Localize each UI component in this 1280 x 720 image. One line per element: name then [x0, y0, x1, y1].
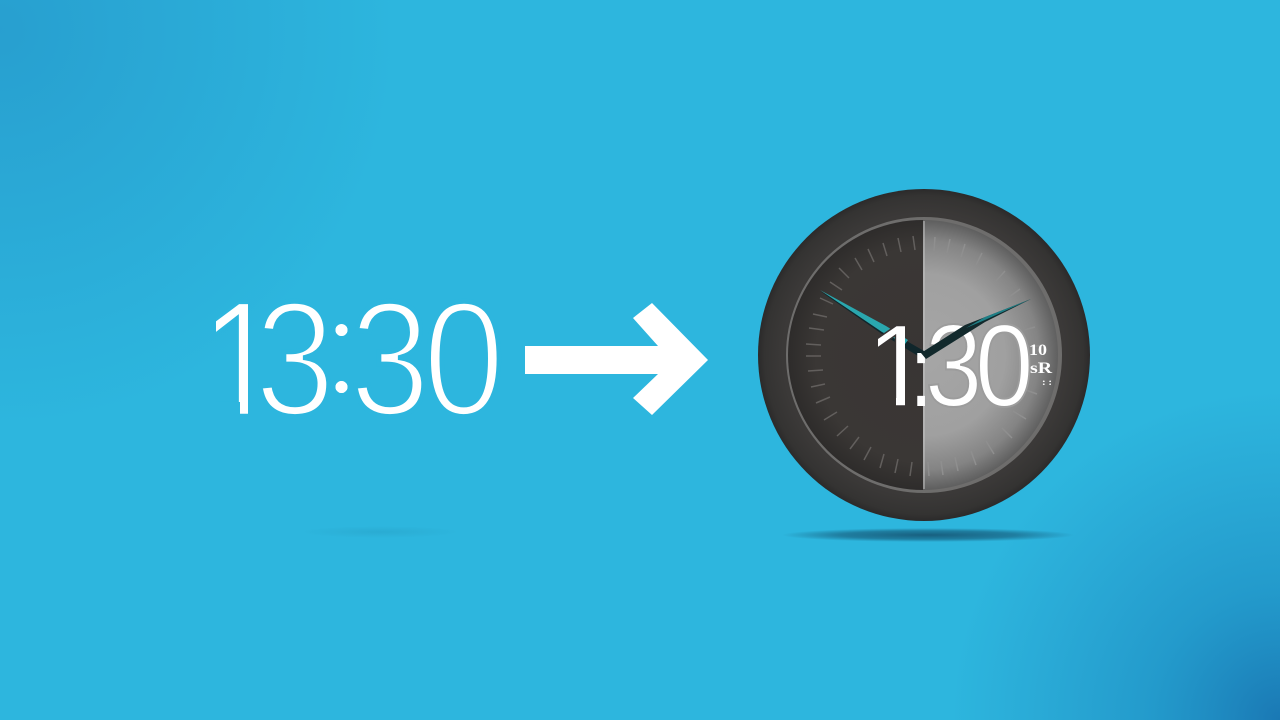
24-hour time: 13:30 — [216, 304, 497, 414]
tick marks — [806, 236, 1040, 476]
24-hour time: 13:30: 1 — [200, 268, 283, 450]
24-hour time: 13:30: 3 — [350, 267, 430, 450]
hour hand dark — [921, 299, 1031, 359]
tiny label: : : — [1042, 377, 1052, 387]
clock outer bezel — [758, 189, 1090, 521]
clock — [758, 189, 1090, 521]
digits 30 of 1:30: 0 — [975, 300, 1034, 431]
tiny label: 10 — [1029, 342, 1047, 359]
tiny label — [1029, 342, 1053, 387]
minute hand teal — [820, 290, 924, 359]
arrow — [525, 303, 708, 415]
digits 30 of 1:30: 3 — [925, 301, 982, 431]
24-hour time: 13:30: 3 — [255, 267, 335, 450]
digit 1 of 1:30: 1 — [866, 300, 931, 431]
faint shadow under 13:30 — [300, 526, 460, 538]
digits 30 of 1:30 — [925, 300, 1034, 431]
24-hour time: 13:30: 0 — [423, 268, 505, 450]
24-hour time: 13:30: : — [323, 271, 360, 423]
tiny label: sR — [1030, 360, 1053, 377]
center divider highlight — [923, 221, 925, 489]
clock face halves — [788, 220, 1058, 490]
clock shadow — [782, 528, 1074, 542]
clock inner ring — [786, 217, 1062, 493]
colon of 1:30: : — [910, 317, 932, 428]
